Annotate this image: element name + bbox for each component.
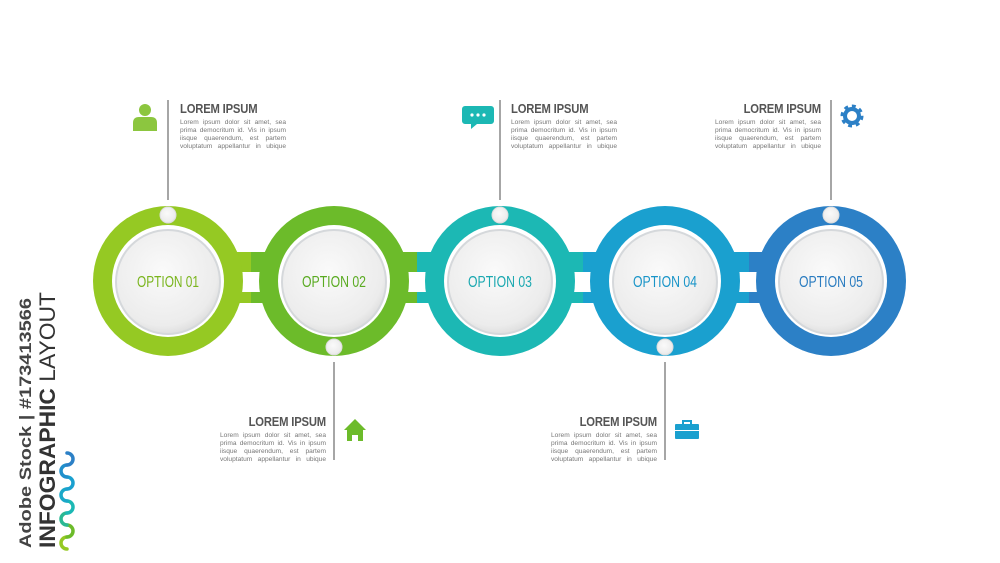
text: top 5: Lorem ipsum dolor sit amet, sea prima democritum id. Vis in ipsum iisque quaerendum, est partem voluptatum appellantur in ubique [715,119,821,150]
icon: gear [843,107,861,125]
text: bottom 4: LOREM IPSUM [580,415,657,429]
text: top 3 [511,102,617,150]
option 04 [590,206,740,356]
icon: briefcase [675,421,699,439]
option 01 [93,206,243,356]
text: top 5 [715,102,821,150]
text: top 1 [180,102,286,150]
text: top 1: Lorem ipsum dolor sit amet, sea prima democritum id. Vis in ipsum iisque quaerendum, est partem voluptatum appellantur in ubique [180,119,286,150]
icon: house [344,419,366,441]
text: bottom 2: LOREM IPSUM [249,415,326,429]
option 03 [425,206,575,356]
option 05 [756,206,906,356]
option 04: OPTION 04 [633,274,697,291]
text: top 3: LOREM IPSUM [511,102,588,116]
logo waves [61,453,73,549]
text: top 5: LOREM IPSUM [744,102,821,116]
connecting bands [168,252,831,303]
option 01: OPTION 01 [137,274,199,291]
text: bottom 2: Lorem ipsum dolor sit amet, sea prima democritum id. Vis in ipsum iisque quaerendum, est partem voluptatum appellantur in ubique [220,432,326,463]
watermark sidebar: INFOGRAPHIC LAYOUT [35,292,60,548]
icon: chat bubble [462,106,494,129]
text: top 3: Lorem ipsum dolor sit amet, sea prima democritum id. Vis in ipsum iisque quaerendum, est partem voluptatum appellantur in ubique [511,119,617,150]
option 03: OPTION 03 [468,274,532,291]
text: bottom 4: Lorem ipsum dolor sit amet, sea prima democritum id. Vis in ipsum iisque quaerendum, est partem voluptatum appellantur in ubique [551,432,657,463]
watermark sidebar: Adobe Stock | #173413566 [16,298,35,548]
text: bottom 2 [220,415,326,463]
leader lines [168,100,831,460]
text: bottom 4 [551,415,657,463]
watermark sidebar [16,292,60,548]
text: top 1: LOREM IPSUM [180,102,257,116]
option 05: OPTION 05 [799,274,863,291]
option 02 [259,206,409,356]
option 02: OPTION 02 [302,274,366,291]
icon: person [133,104,157,131]
